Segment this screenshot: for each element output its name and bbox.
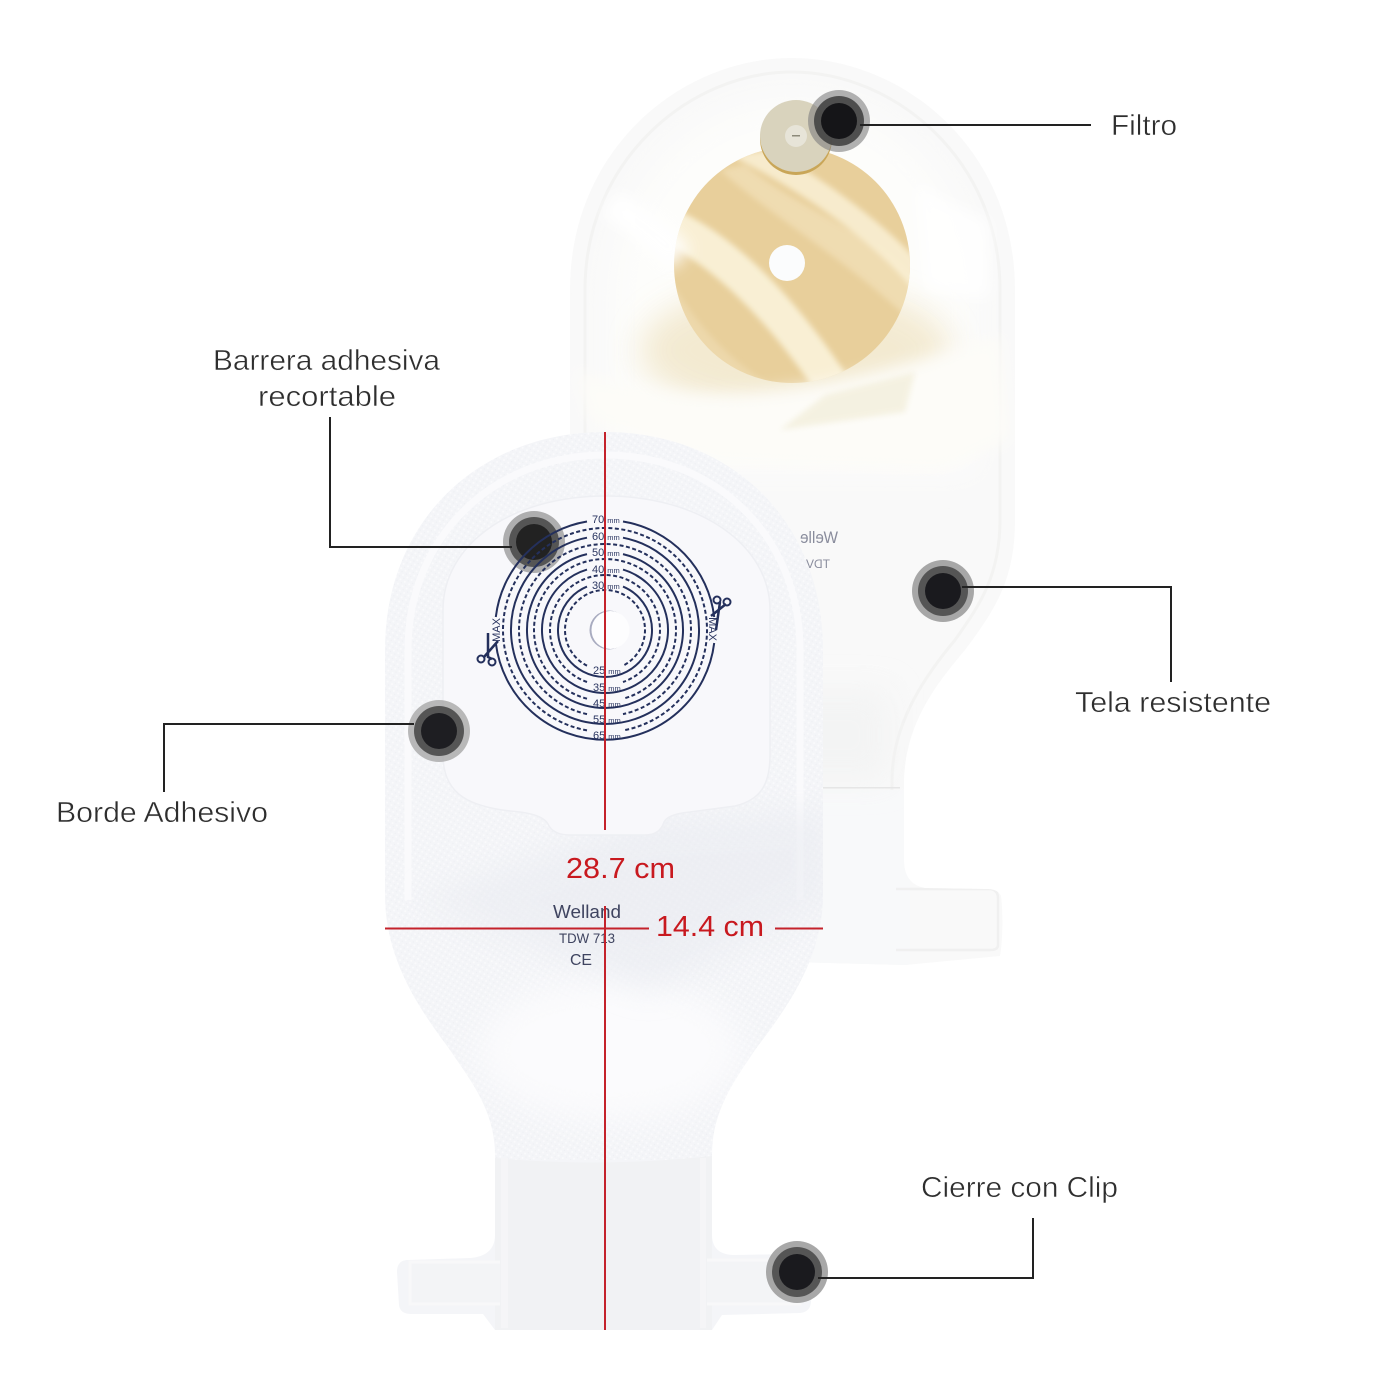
mm size labels: 50 mm — [592, 547, 620, 559]
mm size labels: 35 mm — [593, 682, 621, 694]
clip closure panel — [694, 1157, 706, 1160]
mm size labels: 40 mm — [592, 564, 620, 576]
callout: Filtro: Filtro — [1111, 110, 1177, 142]
mirrored brand text on back pouch: Welle — [800, 528, 838, 547]
callout: Barrera adhesiva recortable — [213, 345, 512, 547]
brand text on front pouch: CE — [570, 952, 592, 969]
marker: barrera adhesiva — [503, 511, 565, 573]
callout: Borde Adhesivo: Borde Adhesivo — [56, 797, 268, 829]
mm size labels: 55 mm — [593, 714, 621, 726]
brand text on front pouch — [553, 902, 621, 969]
mm size labels: 25 mm — [593, 665, 621, 677]
mirrored brand text on back pouch: TDV — [806, 557, 830, 571]
scissors and MAX left — [478, 617, 503, 666]
callout: Barrera adhesiva recortable: Barrera adhesiva — [213, 345, 441, 377]
measure: 14.4 cm width: 14.4 cm — [656, 911, 764, 943]
mm size labels: 70 mm — [592, 514, 620, 526]
mm size labels: 65 mm — [593, 730, 621, 742]
brand text on front pouch: TDW 713 — [559, 930, 615, 946]
brand text on front pouch: Welland — [553, 902, 621, 922]
panel: front pouch — [385, 400, 830, 1335]
callout: Cierre con Clip: Cierre con Clip — [921, 1172, 1118, 1204]
mm size labels: 45 mm — [593, 698, 621, 710]
gas filter disc — [760, 100, 832, 175]
scissors and MAX right: MAX — [706, 617, 718, 642]
callout: Tela resistente: Tela resistente — [1075, 687, 1271, 719]
callout: Borde Adhesivo — [56, 700, 470, 829]
mm size labels: 30 mm — [592, 580, 620, 592]
panel: back pouch — [570, 58, 1015, 965]
disc hole — [769, 245, 805, 281]
scissors and MAX left: MAX — [491, 617, 503, 642]
cut guide rings — [496, 522, 714, 740]
callout: Filtro — [808, 90, 1177, 152]
callout: Cierre con Clip — [766, 1172, 1118, 1303]
scissors and MAX right — [706, 596, 730, 642]
measure: 28.7 cm height: 28.7 cm — [566, 853, 675, 885]
mirrored brand text on back pouch: C — [805, 578, 814, 592]
yellow adhesive disc — [674, 151, 910, 383]
mirrored brand text on back pouch — [800, 528, 838, 592]
callout: Tela resistente — [912, 560, 1271, 719]
mm size labels: 60 mm — [592, 531, 620, 543]
fold of film over disc — [575, 180, 1010, 470]
adhesive flange — [443, 496, 770, 835]
flange center hole — [590, 610, 630, 650]
callout: Barrera adhesiva recortable: recortable — [258, 381, 396, 413]
mm size labels — [592, 514, 621, 742]
